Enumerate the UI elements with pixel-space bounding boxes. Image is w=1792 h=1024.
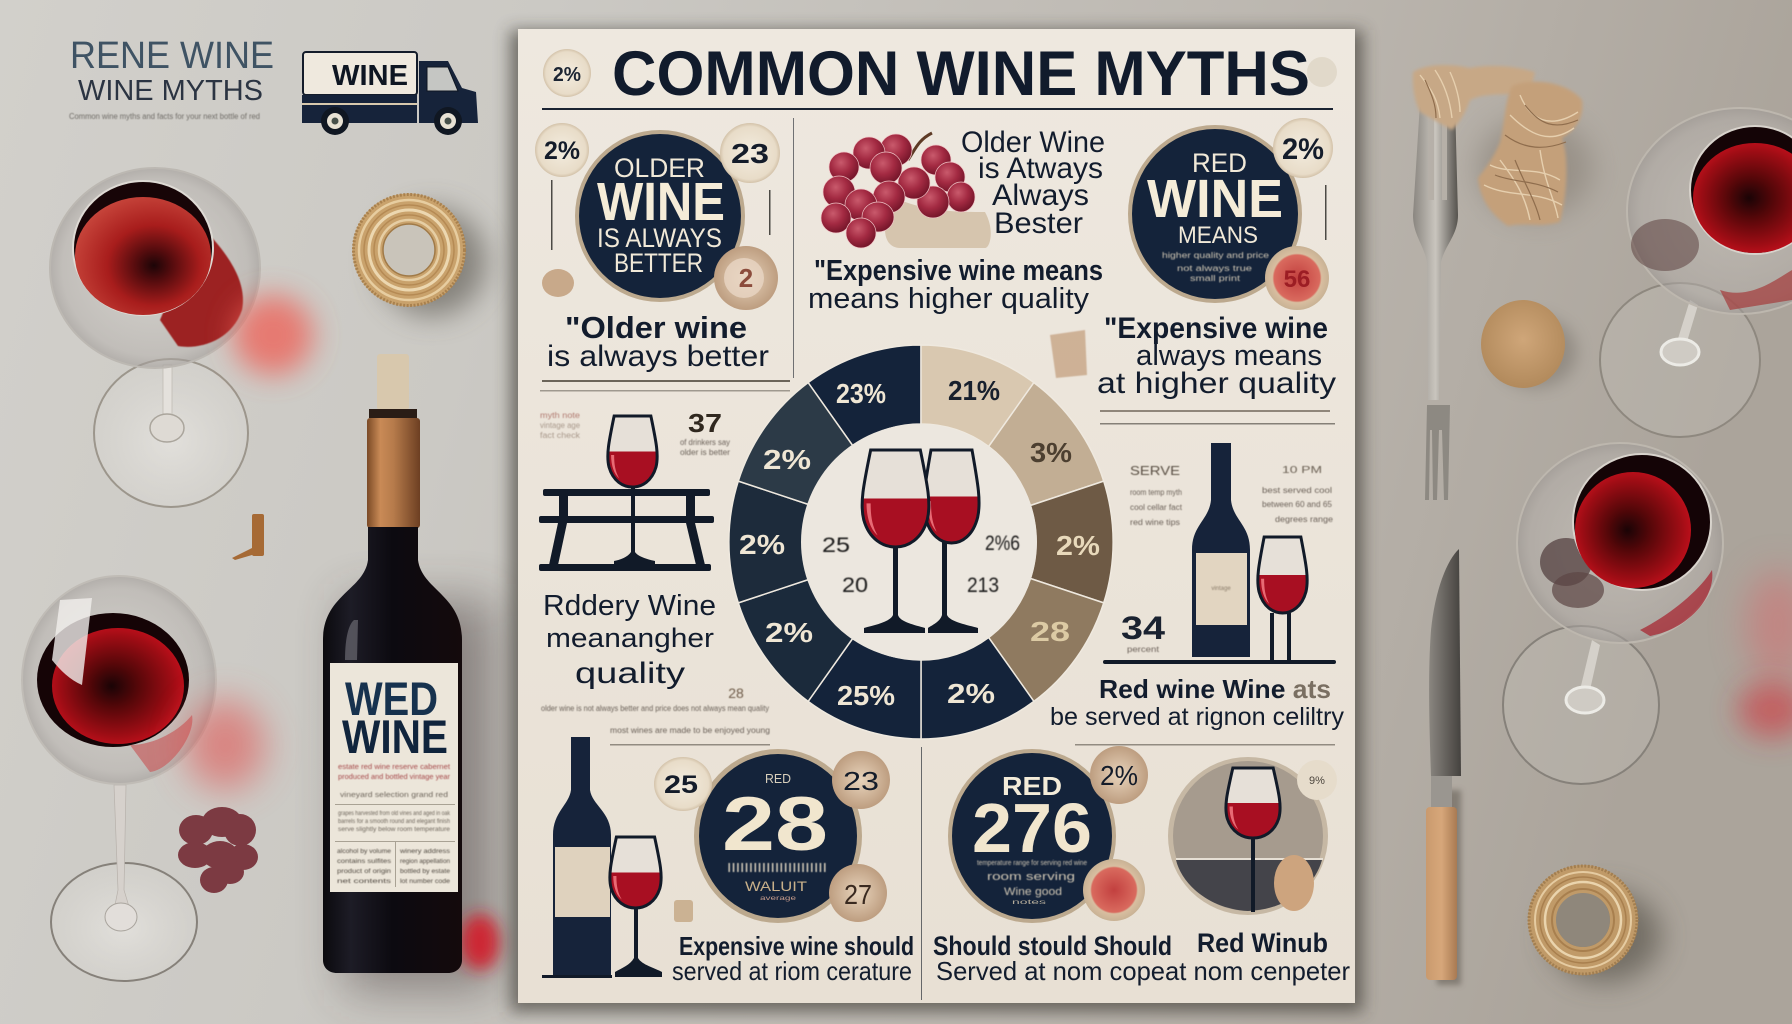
myth text: quality left: [543, 590, 716, 690]
myth circle: red wine means: [1128, 118, 1333, 310]
bottle label: winery address: [399, 849, 450, 855]
bottle label: contains sulfites: [337, 859, 391, 865]
icon: delivery truck: WINE: [332, 60, 408, 92]
icon: copper corkscrew fragment: [232, 514, 264, 560]
title: COMMON WINE MYTHS: [612, 39, 1310, 109]
main fibre clump: [1478, 82, 1582, 226]
circle text: RED: [1002, 771, 1062, 801]
decorative red glow lower: [185, 700, 265, 790]
small badge: [1297, 760, 1337, 800]
bottle label: alcohol by volume: [337, 849, 392, 855]
circle text: 28: [722, 782, 828, 867]
badge red: 56: [1284, 266, 1310, 293]
bottle label: bottled by estate: [400, 869, 451, 875]
circle text: notes: [1012, 900, 1046, 906]
icon: bottle and glass right: [1103, 443, 1336, 664]
bottle label: barrels for a smooth round and elegant finish: [338, 819, 450, 825]
segment 25% dark: [808, 638, 921, 739]
donut labels: 2%: [765, 617, 813, 648]
stat 34%: 34: [1121, 610, 1165, 646]
brand heading: RENE WINE: [70, 35, 274, 77]
brand tagline: Common wine myths and facts for your next bottle of red: [69, 112, 260, 121]
small stat beside table: of drinkers say: [680, 438, 730, 447]
icon: bottle and glass right: vintage: [1211, 586, 1231, 592]
badge 2%: 2%: [1282, 133, 1324, 166]
circle text: BETTER: [614, 248, 703, 278]
myth text: expensive wine right: "Expensive wine: [1104, 312, 1328, 345]
right small notes: degrees range: [1275, 515, 1334, 524]
myth circle: 28: [654, 749, 890, 923]
badge 2%: [1273, 118, 1333, 178]
small note left of glass: myth note: [540, 411, 581, 420]
decorative red glow right: [1738, 570, 1792, 738]
donut centre small figures: 25: [822, 534, 850, 557]
poster shadow: [510, 30, 1363, 1012]
segment 28 tan: [989, 578, 1104, 701]
donut centre small figures: 20: [842, 574, 868, 597]
icon: delivery truck: [302, 52, 478, 135]
circle text: MEANS: [1178, 222, 1258, 249]
icon: grape cluster small: [178, 807, 258, 893]
small note left of glass: fact check: [540, 431, 581, 440]
bottle label: vineyard selection grand red: [340, 792, 448, 799]
circle text: small print: [1190, 274, 1241, 283]
segment 2% lower left: [738, 578, 853, 701]
myth text: expensive wine right: [1097, 312, 1336, 400]
wine glass top right: [1600, 108, 1792, 437]
donut labels: [739, 375, 1100, 711]
icon: two wine glasses: [861, 450, 980, 633]
myth text: older wine centre: is Atways: [978, 152, 1103, 185]
title badge left: [543, 49, 591, 97]
badge 2%: 2%: [1100, 760, 1138, 791]
myth circle: 276: [948, 746, 1148, 923]
gold coil ring top: [354, 194, 486, 316]
donut labels: 3%: [1030, 437, 1072, 468]
small note under quality: 28: [728, 685, 744, 701]
myth text: quality left: Rddery Wine: [543, 590, 716, 622]
circle text: higher quality and price: [1162, 251, 1270, 260]
small cork: [674, 900, 693, 922]
bottle label: product of origin: [337, 869, 391, 875]
donut chart: [729, 345, 1113, 739]
myth text: served right: [1050, 674, 1345, 731]
segment 23%: [808, 345, 921, 446]
title badge left: 2%: [553, 64, 581, 86]
circle text: Wine good: [1004, 886, 1062, 898]
badge 27: 27: [844, 879, 872, 910]
bottle label: WED: [345, 672, 438, 725]
cork bundle: [1274, 855, 1314, 911]
myth text: served bottom left: served at riom cerature: [672, 956, 912, 986]
segment 2% brown: [1030, 481, 1113, 603]
brand subheading: WINE MYTHS: [78, 75, 263, 107]
circle text: not always true: [1177, 264, 1253, 273]
circle text: WINE: [1147, 169, 1283, 229]
donut labels: 28: [1030, 616, 1070, 647]
bottle label: grapes harvested from old vines and aged in oak: [338, 811, 451, 817]
wine glass middle right: [1503, 443, 1723, 784]
copper capsule: [367, 418, 420, 528]
wine glass bottom left: [22, 576, 216, 981]
icon: table with wine glass: [539, 416, 714, 571]
small badge: 9%: [1309, 775, 1325, 787]
right small notes: 10 PM: [1282, 465, 1322, 476]
poster panel: [518, 29, 1355, 1003]
right small notes: [1130, 463, 1334, 527]
bottle label: [330, 663, 458, 892]
badge 2%: [535, 123, 589, 177]
circle text: [1147, 148, 1283, 283]
donut labels: 2%: [947, 678, 995, 709]
cork ball: [1481, 300, 1577, 388]
myth text: older wine centre: Bester: [994, 207, 1083, 240]
gold coil ring bottom right: [1529, 866, 1661, 982]
circle text: [597, 153, 725, 278]
donut labels: 23%: [836, 378, 886, 409]
badge 27: [829, 864, 887, 922]
bottle label: lot number code: [400, 879, 451, 885]
circle text: room serving: [987, 871, 1075, 883]
small stat beside table: [680, 408, 730, 457]
wine glass top left: [50, 168, 260, 507]
segment 3%: [989, 383, 1104, 506]
circle text: RED: [765, 771, 791, 786]
bottle label: WINE: [342, 710, 448, 763]
myth text: served bottom right: Served at nom copeat nom cenpeter: [936, 956, 1350, 986]
circle text: WINE: [597, 172, 725, 232]
bottle label: produced and bottled vintage year: [338, 774, 451, 781]
myth text: older wine centre: [961, 126, 1105, 240]
circle text: WALUIT: [745, 878, 808, 894]
myth circle: older wine: [535, 123, 780, 310]
badge 2%: [1090, 746, 1148, 804]
poster panel: most wines are made to be enjoyed young: [610, 726, 770, 735]
icon: knife: [1426, 549, 1461, 985]
right small notes: cool cellar fact: [1130, 503, 1183, 512]
myth text: served right: be served at rignon celiltry: [1050, 703, 1345, 731]
badge z: [714, 246, 778, 310]
myth text: expensive wine right: at higher quality: [1097, 367, 1336, 400]
segment 2% upper left: [738, 383, 853, 506]
title badge right: [1307, 57, 1337, 87]
small stat beside table: older is better: [680, 448, 730, 457]
right small notes: red wine tips: [1130, 518, 1180, 527]
donut centre small figures: [822, 532, 1020, 597]
stat 34%: percent: [1127, 645, 1160, 654]
donut labels: 2%: [1056, 530, 1100, 561]
caption row: older wine is not always better and price does not always mean quality: [541, 704, 769, 713]
myth text: served bottom right: Should stould Should: [933, 931, 1172, 961]
myth text: older wine: [547, 310, 769, 373]
donut labels: 2%: [763, 444, 811, 475]
myth text: served right: Red wine Wine ats: [1099, 674, 1331, 704]
myth text: older wine centre: Older Wine: [961, 126, 1105, 159]
myth text: served bottom right: [933, 928, 1350, 986]
circle text: IIIIIIIIIIIIIIIIIIIIIII: [727, 860, 827, 875]
badge red: [1083, 859, 1145, 921]
myth text: expensive wine centre: "Expensive wine means: [814, 255, 1103, 287]
donut labels: 2%: [739, 529, 785, 560]
segment 2% dark: [921, 638, 1034, 739]
badge 2%: 2%: [544, 137, 580, 165]
bottle label: region appellation: [400, 859, 450, 865]
icon: grape bunch: [821, 133, 991, 248]
decorative red glow: [233, 295, 313, 375]
circle text: temperature range for serving red wine: [977, 860, 1087, 867]
badge 25: [654, 757, 712, 811]
icon: bottle and glass bottom left: [542, 737, 662, 978]
donut centre small figures: 2%6: [985, 532, 1020, 555]
segment 21%: [921, 345, 1034, 446]
bottle label: net contents: [337, 879, 391, 885]
myth text: served bottom right: Red Winub: [1197, 928, 1328, 958]
myth text: served bottom left: Expensive wine should: [679, 931, 914, 961]
small note left of glass: vintage age: [540, 421, 581, 430]
small stat beside table: 37: [688, 408, 722, 438]
image circle: glass on table: [1168, 757, 1328, 915]
myth text: expensive wine centre: means higher quality: [808, 283, 1090, 315]
cork: [377, 354, 409, 410]
badge 25: 25: [664, 771, 698, 799]
wine bottle main: [323, 354, 500, 990]
cork icon above donut: [1050, 330, 1087, 378]
circle text: RED: [1192, 148, 1247, 178]
icon: fork: [1413, 103, 1458, 500]
stat 34%: [1121, 610, 1165, 654]
circle text: IS ALWAYS: [597, 223, 722, 253]
myth text: older wine: is always better: [547, 340, 769, 373]
badge 23: 23: [843, 766, 879, 796]
right small notes: between 60 and 65: [1262, 500, 1333, 509]
circle text: 276: [972, 789, 1092, 867]
myth text: quality left: meanangher: [546, 623, 714, 653]
myth text: expensive wine right: always means: [1136, 340, 1322, 372]
segment 2% left: [729, 481, 812, 603]
small note left of glass: [540, 411, 581, 440]
donut inner circle: [801, 424, 1037, 660]
donut labels: 21%: [948, 375, 1000, 406]
right small notes: room temp myth: [1130, 488, 1182, 497]
donut centre small figures: 213: [967, 574, 999, 597]
badge red: [1265, 246, 1329, 310]
circle text: [972, 771, 1092, 906]
bottle label: estate red wine reserve cabernet: [338, 764, 450, 771]
myth text: older wine: "Older wine: [565, 310, 747, 345]
myth text: quality left: quality: [575, 657, 685, 690]
circle text: OLDER: [614, 153, 705, 183]
badge 23: 23: [731, 138, 769, 169]
brand block: Rene Wine: [69, 35, 274, 121]
myth text: served bottom left: [672, 931, 914, 986]
bottle body: [323, 527, 462, 973]
tuft over fork: [1413, 65, 1535, 130]
circle text: [722, 771, 828, 902]
badge z: 2: [739, 263, 753, 293]
myth text: older wine centre: Always: [992, 179, 1089, 212]
circle text: average: [760, 896, 797, 902]
right small notes: SERVE: [1130, 463, 1180, 478]
right small notes: best served cool: [1262, 486, 1332, 495]
donut labels: 25%: [837, 680, 895, 711]
cork icon: [542, 269, 574, 297]
badge 23: [832, 751, 890, 809]
bottle label: serve slightly below room temperature: [338, 827, 451, 833]
badge 23: [720, 123, 780, 183]
fibrous cork bundle: [1413, 65, 1593, 226]
myth text: expensive wine centre: [808, 255, 1103, 315]
